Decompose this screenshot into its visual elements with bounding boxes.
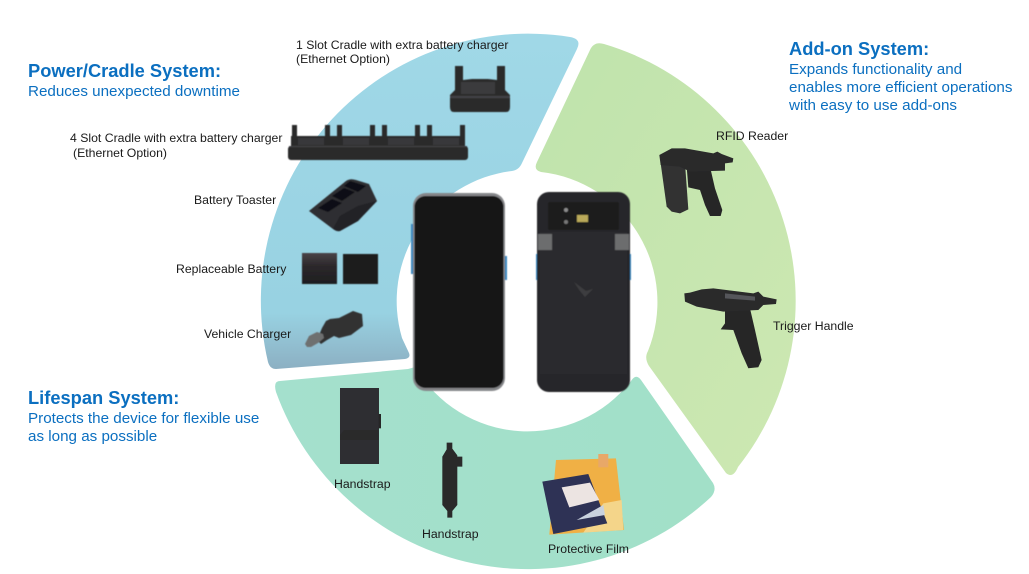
label: 1 slot cradle: (Ethernet Option) [296, 52, 390, 66]
icon: 4 slot cradle [288, 125, 468, 160]
heading: power/cradle system: Power/Cradle System: [28, 60, 221, 81]
heading: add-on system: with easy to use add-ons [788, 97, 957, 114]
icon: belt holster [340, 388, 381, 464]
label: 1 slot cradle: 1 Slot Cradle with extra battery charger [296, 38, 508, 52]
label: handstrap 1: Handstrap [334, 477, 391, 491]
label: trigger handle: Trigger Handle [773, 319, 854, 333]
label: battery toaster: Battery Toaster [194, 193, 276, 207]
label: protective film: Protective Film [548, 542, 629, 556]
icon: battery toaster [309, 179, 377, 231]
icon: 1 slot cradle [450, 66, 510, 112]
label: replaceable battery: Replaceable Battery [176, 262, 287, 276]
heading: lifespan system [28, 387, 259, 445]
panel: add-on segment [536, 43, 796, 475]
label: handstrap 2: Handstrap [422, 527, 479, 541]
heading: add-on system: enables more efficient operations [789, 79, 1013, 96]
heading: lifespan system: Lifespan System: [28, 387, 179, 408]
heading: power/cradle system [28, 60, 240, 100]
icon: handstrap [442, 443, 462, 518]
icon: replaceable battery front [302, 253, 337, 284]
icon: rear phone [536, 192, 631, 392]
heading: add-on system: Add-on System: [789, 38, 929, 59]
heading: lifespan system: Protects the device for flexible use [28, 410, 259, 427]
icon: vehicle charger [305, 311, 363, 347]
heading: power/cradle system: Reduces unexpected downtime [28, 83, 240, 100]
icon: rfid reader [659, 148, 733, 216]
label: 4 slot cradle: (Ethernet Option) [73, 146, 167, 160]
label: rfid reader: RFID Reader [716, 129, 788, 143]
icon: trigger handle [684, 288, 777, 368]
panel: lifespan segment [275, 367, 715, 569]
heading: add-on system [788, 38, 1013, 114]
heading: add-on system: Expands functionality and [789, 61, 962, 78]
icon: replaceable battery back [343, 254, 378, 284]
panel: power/cradle segment [261, 34, 578, 369]
label: vehicle charger: Vehicle Charger [204, 327, 291, 341]
label: 4 slot cradle: 4 Slot Cradle with extra battery charger [70, 131, 282, 145]
heading: lifespan system: as long as possible [28, 428, 157, 445]
icon: protective film [542, 454, 624, 535]
icon: front phone [411, 193, 507, 391]
